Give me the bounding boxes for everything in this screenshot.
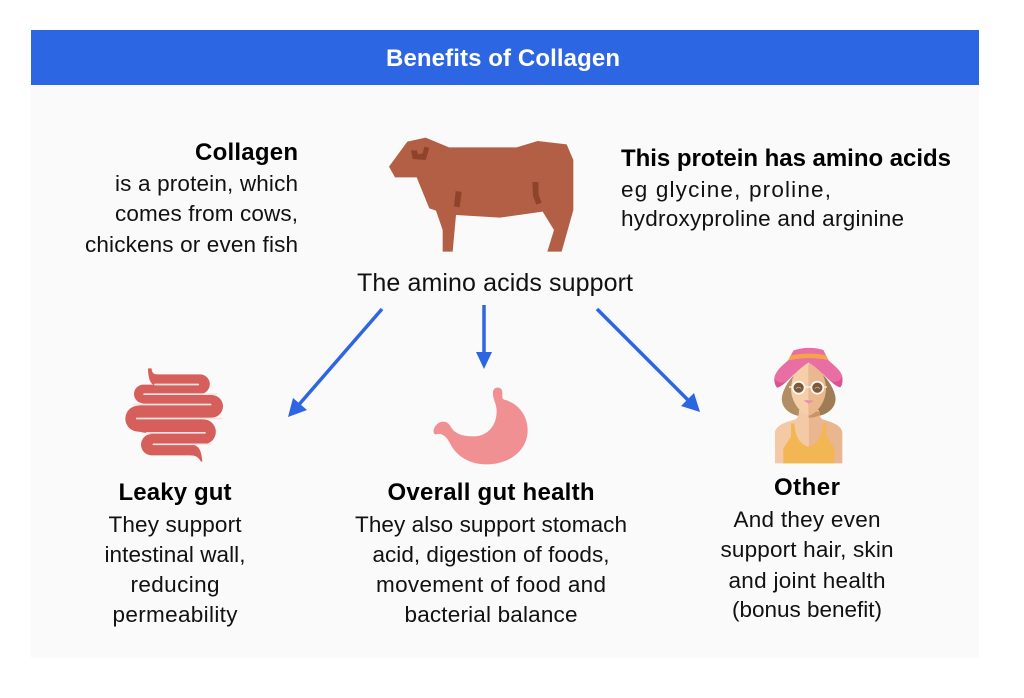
icon: woman with hat	[774, 348, 842, 463]
hat brim shading	[774, 377, 842, 388]
text block: amino acids: hydroxyproline and arginine	[621, 206, 904, 231]
text block: other: (bonus benefit)	[732, 597, 882, 622]
text block: overall gut health: Overall gut health	[388, 479, 594, 506]
text block: overall gut health: acid, digestion of foods,	[372, 542, 610, 567]
text block: leaky gut: Leaky gut	[118, 479, 232, 506]
header banner: Benefits of Collagen	[386, 45, 620, 72]
text block: amino acids: eg glycine, proline,	[621, 177, 831, 202]
text block: leaky gut: permeability	[112, 602, 238, 627]
text block: leaky gut: intestinal wall,	[104, 542, 246, 567]
icon: stomach	[434, 388, 528, 464]
header banner	[31, 30, 979, 85]
arrow: to overall gut health	[476, 305, 492, 369]
icon: intestine	[125, 368, 223, 462]
text block: overall gut health: They also support stomach	[355, 512, 627, 537]
hair	[782, 365, 809, 417]
text block: leaky gut: reducing	[130, 572, 220, 597]
text block: other: And they even	[734, 507, 880, 532]
icon: cow	[389, 138, 573, 252]
text block: collagen: Collagen	[195, 139, 298, 166]
text block: collagen: comes from cows,	[115, 201, 298, 226]
text block: leaky gut: They support	[108, 512, 242, 537]
text block: other: Other	[774, 474, 840, 501]
panel: background	[31, 85, 979, 658]
sunglasses	[793, 382, 805, 394]
text block: collagen: is a protein, which	[115, 171, 298, 196]
text block: other	[720, 474, 894, 622]
arrow: to leaky gut	[288, 309, 382, 417]
text block: overall gut health: movement of food and	[376, 572, 606, 597]
hat band	[788, 354, 828, 360]
face	[791, 362, 809, 416]
neck shadow	[809, 412, 820, 418]
text block: overall gut health: bacterial balance	[404, 602, 578, 627]
hat	[774, 348, 842, 388]
text block: amino acids	[621, 145, 951, 231]
text block: other: and joint health	[728, 568, 886, 593]
arrow: to other	[597, 309, 700, 412]
text block: amino acids: This protein has amino acids	[621, 145, 951, 172]
tank top	[783, 423, 834, 463]
text block: collagen	[85, 139, 298, 257]
text block: overall gut health	[355, 479, 627, 627]
text: the amino acids support: The amino acids support	[357, 269, 633, 297]
text block: collagen: chickens or even fish	[85, 232, 298, 257]
text block: other: support hair, skin	[720, 537, 894, 562]
text block: leaky gut	[104, 479, 246, 627]
shoulders and neck	[775, 410, 809, 463]
lips	[804, 400, 814, 404]
